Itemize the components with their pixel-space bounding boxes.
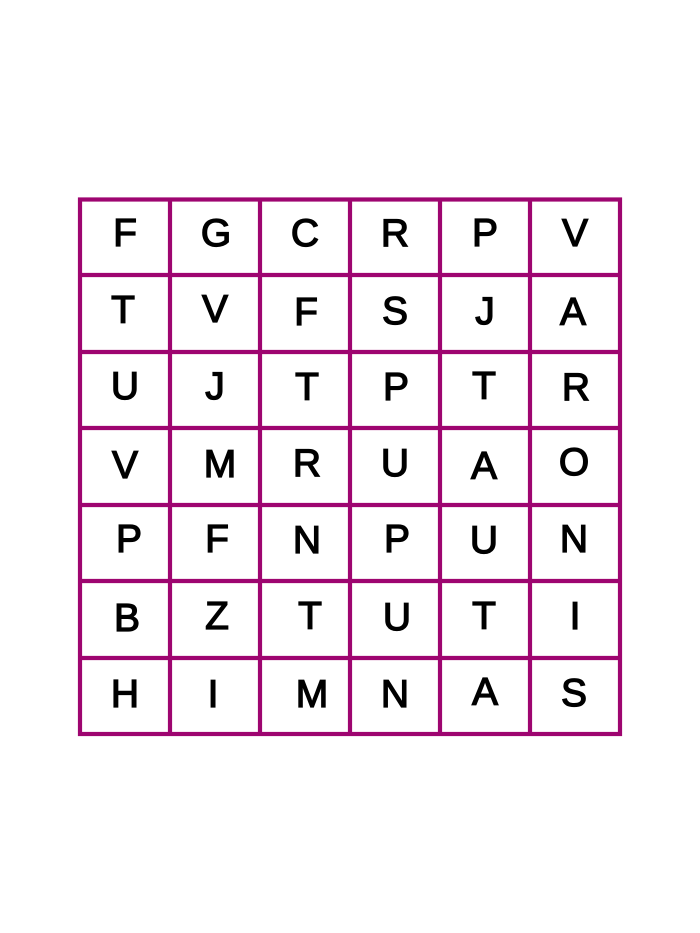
letters: row 3 [111,365,590,409]
letters: row 5: P [116,518,142,561]
letters: row 4: O [559,441,589,484]
letters: row 4: R [293,442,321,485]
letters: row 2 [111,288,586,334]
letters: row 2: S [382,290,408,333]
letters: row 7: M [296,673,328,716]
letters: row 4: A [471,445,497,488]
letters: row 7: S [561,672,587,715]
letters: row 5: N [293,519,321,562]
letters: row 6: U [383,596,411,639]
letters: row 6: T [298,595,322,638]
letters: row 1: G [201,212,231,255]
letters: row 3: T [472,365,496,408]
letters: row 7 [111,671,587,716]
letters: row 3: P [383,366,409,409]
letters: row 4: U [381,442,409,485]
letters: row 1 [113,212,588,255]
letters: row 5: F [205,518,229,561]
letters: row 7: A [472,671,498,714]
letters: row 3: U [111,365,139,408]
letters: row 5: P [384,518,410,561]
letters: row 2: V [202,288,228,331]
letters: row 3: T [295,366,319,409]
letters: row 2: J [475,290,495,333]
letters: row 7: H [111,673,139,716]
letters: row 6: I [570,595,580,638]
letters: row 5 [116,518,588,562]
letters: row 1: R [381,212,409,255]
letters: row 1: C [291,212,319,255]
letters: row 6: Z [205,595,229,638]
letters: row 7: I [208,673,218,716]
letters: row 7: N [381,673,409,716]
letters: row 6 [114,595,580,640]
letters: row 3: R [562,366,590,409]
letters: row 6: B [114,597,140,640]
letters: row 1: F [113,212,137,255]
letters: row 1: V [562,212,588,255]
letters: row 4: M [204,443,236,486]
letters: row 4 [112,441,589,488]
letters: row 4: V [112,444,138,487]
letters: row 2: A [560,291,586,334]
letters: row 5: N [560,518,588,561]
letters: row 2: F [294,291,318,334]
letters: row 3: J [205,365,225,408]
letters: row 2: T [111,289,135,332]
letters: row 5: U [470,519,498,562]
letters: row 1: P [472,212,498,255]
letters: row 6: T [472,595,496,638]
